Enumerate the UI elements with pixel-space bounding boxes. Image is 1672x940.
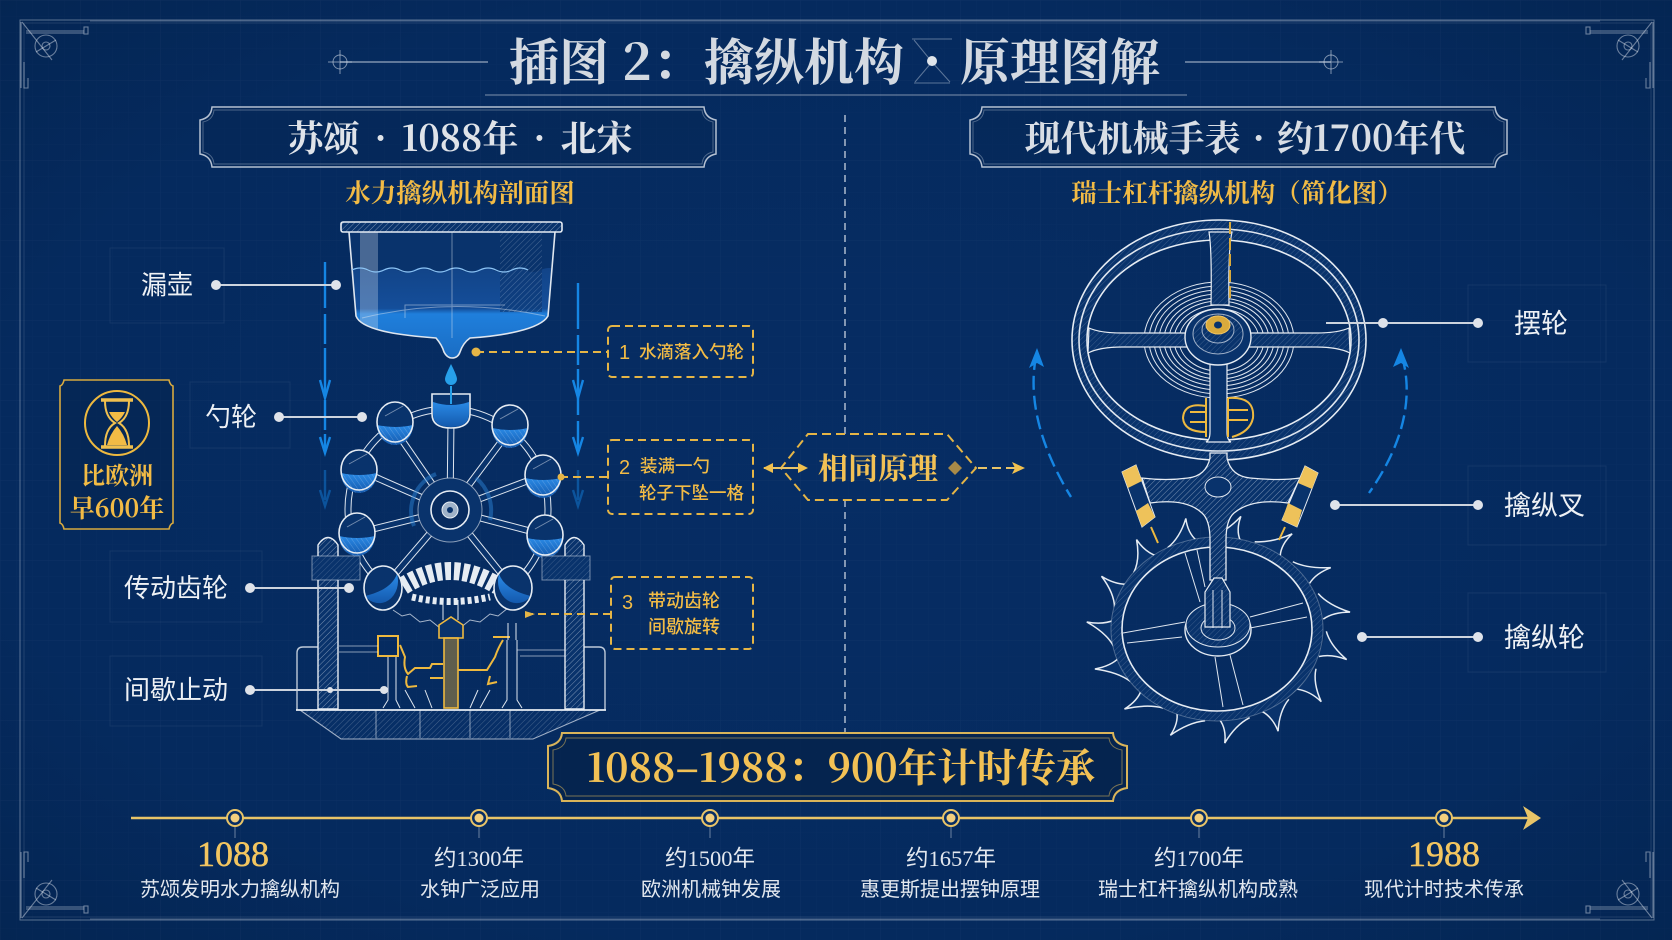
wheel rim [348,409,548,585]
timeline node 1300: 水钟广泛应用 [420,873,540,902]
callout 3 [525,577,753,649]
label: scoop wheel: 勺轮 [205,397,257,434]
timeline node 1700 [1098,810,1298,902]
label: intermittent stop: 间歇止动 [124,670,228,707]
label: intermittent stop [124,670,388,707]
transmission gear [393,571,508,628]
label: pallet fork: 擒纵叉 [1504,484,1585,523]
left post [318,538,338,709]
clepsydra vessel [341,222,562,360]
timeline node 1088: 苏颂发明水力擒纵机构 [140,873,340,902]
title right ornament [1185,50,1343,74]
subtitle left: 水力擒纵机构剖面图 [345,174,575,210]
timeline node 1657 [860,810,1040,902]
gold stop mechanism [339,617,565,708]
gold roller [1183,398,1253,437]
hub [1185,604,1251,656]
swing arrows [1029,348,1409,497]
callout 3: 间歇旋转 [648,613,720,639]
label: clepsydra: 漏壶 [141,265,193,302]
title [328,23,1343,95]
right post [565,538,584,709]
callout 2: 2 [619,457,630,479]
timeline node 1700: 约1700年 [1154,846,1244,871]
callout 1 [472,326,753,377]
header: Su Song [200,107,716,167]
title left ornament [328,50,488,74]
badge: same principle [763,434,1025,500]
water wheel [339,386,563,588]
base block [297,647,605,710]
label: scoop wheel [205,397,367,434]
timeline node 1088 [140,810,340,902]
label: pallet fork [1330,484,1585,523]
timeline node 1657: 惠更斯提出摆钟原理 [860,873,1040,902]
callout 2: 轮子下坠一格 [639,480,744,505]
icon: hourglass [85,391,149,455]
badge: 600 years earlier: 早600年 [70,489,164,525]
title text: 原理图解 [960,23,1160,95]
label: escape wheel [1357,616,1585,655]
callout 1: 水滴落入勺轮 [639,339,744,364]
rim [1111,537,1323,721]
timeline banner: 1088–1988：900年计时传承 [587,738,1095,794]
left arrows [764,467,806,469]
hub [1185,309,1251,365]
wheel spokes [357,420,545,588]
badge: 600 years earlier [60,380,173,529]
rim [1072,220,1366,460]
label: drive gear [124,568,354,605]
hub glow arcs [411,474,491,526]
subtitle right: 瑞士杠杆擒纵机构（简化图） [1071,174,1403,210]
foundation [300,710,600,739]
timeline node 1657: 约1657年 [906,846,996,871]
spokes [1088,328,1190,353]
badge: same principle: 相同原理 [818,444,938,488]
blue flow arrows right [573,283,583,506]
gold jewel [1206,316,1230,334]
centre divider [844,115,846,733]
label: clepsydra [141,265,341,302]
label: balance wheel: 摆轮 [1514,302,1568,341]
blue flow arrows left [320,262,330,506]
header: modern watch [970,107,1507,167]
header: Su Song: 苏颂 · 1088年 · 北宋 [287,111,633,162]
callout 3: 3 [622,592,633,614]
right arrow [978,467,1020,469]
timeline node 1988: 1988 [1408,834,1480,874]
timeline node 1300 [420,810,540,902]
pallet fork [1122,453,1318,628]
badge: 600 years earlier: 比欧洲 [81,456,153,491]
spokes [1123,550,1307,707]
title text: 擒纵机构 [704,23,904,95]
timeline node 1700: 瑞士杠杆擒纵机构成熟 [1098,873,1298,902]
label: drive gear: 传动齿轮 [124,568,228,605]
timeline node 1300: 约1300年 [434,846,524,871]
gold regulator [1229,222,1231,300]
timeline node 1088: 1088 [197,834,269,874]
timeline node 1988 [1364,810,1524,902]
timeline node 1500: 欧洲机械钟发展 [641,873,781,902]
title text: 2 [622,23,652,95]
faint label boxes [110,248,1606,726]
callout 1: 1 [619,342,630,364]
label: escape wheel: 擒纵轮 [1504,616,1585,655]
callout 2: 装满一勺 [640,453,710,478]
bottom buckets [364,566,532,610]
timeline node 1500 [641,810,781,902]
diamond [948,461,962,475]
title text: ： [652,23,702,95]
frame and base [296,538,606,739]
hairspring [1144,282,1294,398]
wheel hub [418,478,482,542]
timeline axis [131,806,1541,838]
water drop [445,364,457,385]
callout 2 [558,440,753,514]
escape pinion stem [1205,578,1230,627]
timeline node 1988: 现代计时技术传承 [1364,873,1524,902]
title text: · [924,23,941,95]
right pallet [1282,466,1318,527]
buckets [339,386,563,558]
title text: 插图 [509,23,609,95]
label: balance wheel [1326,302,1568,341]
header: modern watch: 现代机械手表 · 约1700年代 [1025,111,1465,162]
balance wheel [1072,220,1366,460]
callout 3: 带动齿轮 [648,587,720,613]
left pallet [1122,465,1155,527]
teeth [1073,504,1366,755]
title dot ornament [912,39,952,83]
timeline node 1500: 约1500年 [665,846,755,871]
escape wheel [1073,504,1366,755]
bearing brackets [312,556,590,580]
